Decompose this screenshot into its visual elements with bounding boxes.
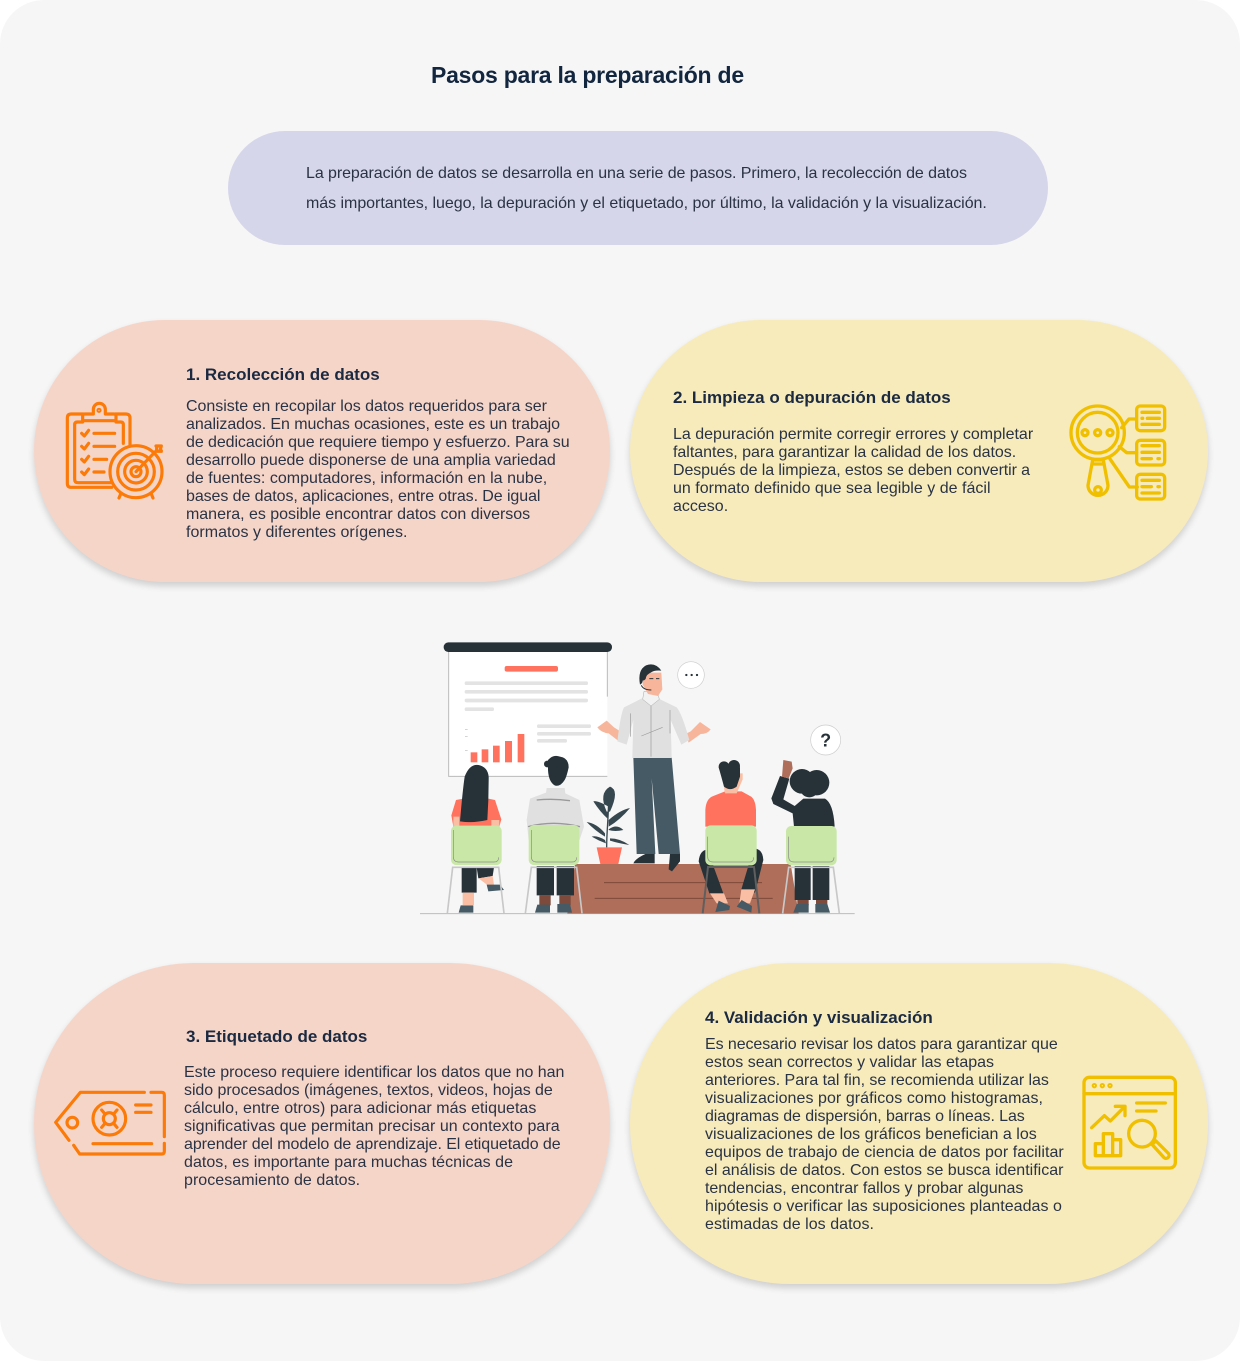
step 4 text: visualizaciones por gráficos como histogramas, (705, 1090, 1043, 1107)
step 4 text: estimadas de los datos. (705, 1216, 874, 1233)
step 1 heading: 1. Recolección de datos (186, 365, 380, 384)
audience member 2 (527, 756, 584, 913)
panel: step 4 (630, 963, 1208, 1284)
presenter (597, 664, 711, 871)
step 4 text: estos sean correctos y validar las etapas (705, 1054, 994, 1071)
step 4 text: equipos de trabajo de ciencia de datos por facilitar (705, 1144, 1064, 1161)
step 2 text (673, 426, 1033, 515)
step 4 text: anteriores. Para tal fin, se recomienda utilizar las (705, 1072, 1049, 1089)
step 1 text: desarrollo puede disponerse de una amplia variedad (186, 452, 556, 469)
step 2 text: faltantes, para garantizar la calidad de los datos. (673, 444, 1016, 461)
step 2 heading: 2. Limpieza o depuración de datos (673, 388, 951, 407)
plant (587, 787, 630, 864)
step 1 text: bases de datos, aplicaciones, entre otras. De igual (186, 488, 540, 505)
panel: introduction (228, 131, 1048, 245)
step 4 text: el análisis de datos. Con estos se busca identificar (705, 1162, 1063, 1179)
icon: analytics window (1082, 1076, 1178, 1170)
projection screen (444, 642, 612, 776)
step 2 text: un formato definido que sea legible y de fácil (673, 480, 991, 497)
step 4 text: Es necesario revisar los datos para garantizar que (705, 1036, 1058, 1053)
floor line (420, 912, 855, 915)
audience member 4 (771, 760, 835, 913)
icon: tag (54, 1090, 166, 1156)
step 3 text: aprender del modelo de aprendizaje. El etiquetado de (184, 1136, 561, 1153)
step 3 text (184, 1064, 564, 1189)
step 4 text (705, 1036, 1064, 1233)
step 3 text: datos, es importante para muchas técnicas de (184, 1154, 513, 1171)
step 4 text: hipótesis o verificar las suposiciones planteadas o (705, 1198, 1062, 1215)
step 2 text: acceso. (673, 498, 728, 515)
step 3 text: sido procesados (imágenes, textos, videos, hojas de (184, 1082, 553, 1099)
step 1 text: de fuentes: computadores, información en la nube, (186, 470, 547, 487)
stage (567, 864, 799, 914)
step 1 text: Consiste en recopilar los datos requeridos para ser (186, 398, 547, 415)
speech bubble: question: ? (820, 731, 831, 751)
icon: magnifier with documents (1069, 404, 1166, 501)
step 4 text: tendencias, encontrar fallos y probar algunas (705, 1180, 1023, 1197)
panel: step 1 (34, 320, 610, 582)
step 2 text: La depuración permite corregir errores y completar (673, 426, 1033, 443)
icon: clipboard and target (66, 402, 164, 500)
step 3 text: procesamiento de datos. (184, 1172, 360, 1189)
step 1 text: de dedicación que requiere tiempo y esfuerzo. Para su (186, 434, 570, 451)
step 3 heading: 3. Etiquetado de datos (186, 1027, 367, 1046)
step 1 text: manera, es posible encontrar datos con diversos (186, 506, 530, 523)
step 4 text: visualizaciones de los gráficos benefician a los (705, 1126, 1037, 1143)
step 1 text: formatos y diferentes orígenes. (186, 524, 408, 541)
intro text: más importantes, luego, la depuración y el etiquetado, por último, la validación y la visualización. (306, 195, 987, 212)
illustration: presenter and audience (420, 642, 855, 914)
speech bubble: ellipsis (678, 662, 704, 688)
panel: step 2 (630, 320, 1208, 582)
speech bubble: question (811, 725, 841, 755)
step 2 text: Después de la limpieza, estos se deben convertir a (673, 462, 1030, 479)
step 3 text: Este proceso requiere identificar los datos que no han (184, 1064, 564, 1081)
step 3 text: cálculo, entre otros) para adicionar más etiquetas (184, 1100, 536, 1117)
audience member 1 (451, 765, 504, 913)
step 4 heading: 4. Validación y visualización (705, 1008, 933, 1027)
step 1 text (186, 398, 570, 541)
title: Pasos para la preparación de (431, 62, 744, 88)
chairs (447, 825, 839, 913)
intro text: La preparación de datos se desarrolla en una serie de pasos. Primero, la recolección de datos (306, 165, 967, 182)
panel: step 3 (34, 963, 610, 1284)
step 4 text: diagramas de dispersión, barras o líneas. Las (705, 1108, 1025, 1125)
intro text (306, 165, 987, 212)
audience member 3 (699, 760, 763, 913)
step 3 text: significativas que permitan precisar un contexto para (184, 1118, 560, 1135)
step 1 text: analizados. En muchas ocasiones, este es un trabajo (186, 416, 560, 433)
